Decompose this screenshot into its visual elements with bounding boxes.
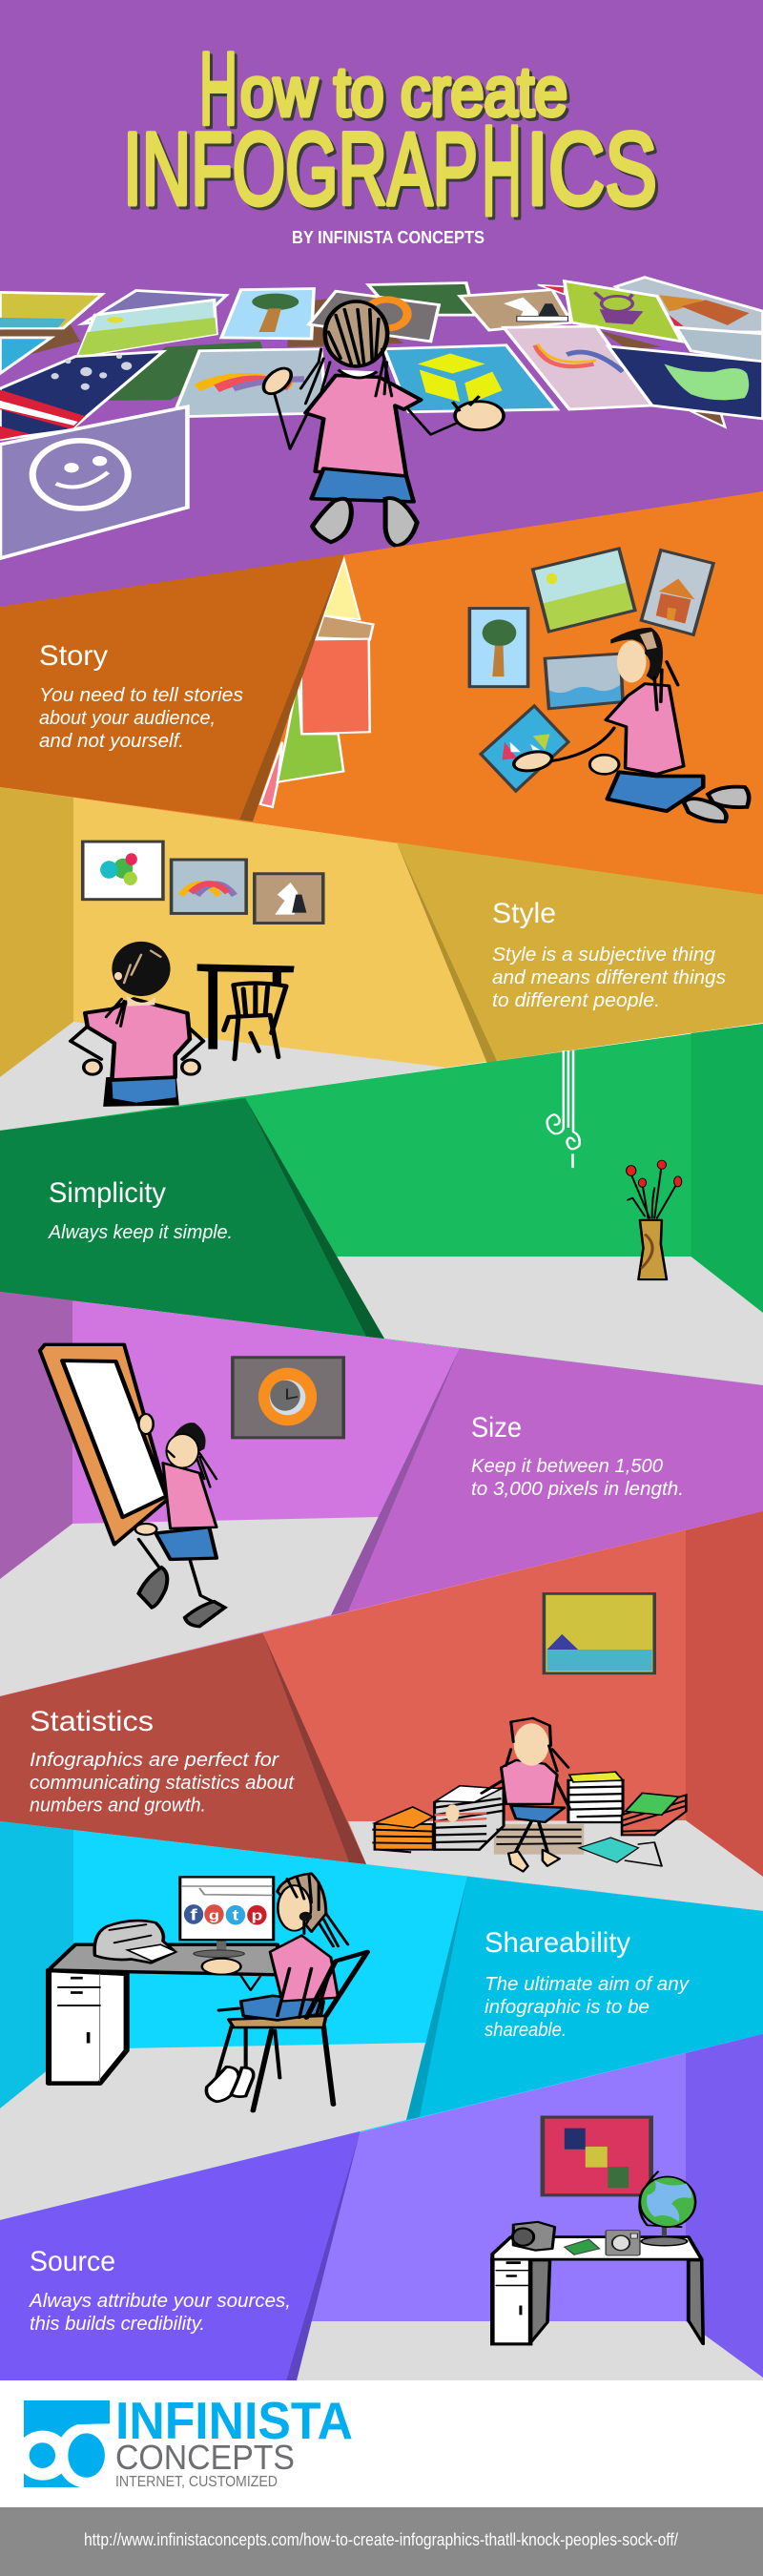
icon: social share buttons: p — [251, 1907, 262, 1923]
text: style body — [492, 945, 726, 1011]
title: How to create: ow to create — [240, 54, 567, 131]
title: How to create: H — [199, 31, 237, 146]
icon: flower vase — [627, 1160, 682, 1279]
pink room left wall — [0, 1292, 72, 1579]
logo tagline: INTERNET, CUSTOMIZED — [115, 2474, 278, 2490]
heading: Statistics: Statistics — [30, 1706, 154, 1737]
icon: hanging white curl — [547, 1050, 580, 1168]
simplicity text panel — [0, 1098, 366, 1337]
heading: Size: Size — [471, 1412, 522, 1444]
icon: clock picture — [233, 1358, 343, 1438]
text: source body — [29, 2291, 291, 2335]
panel: shareability — [0, 1821, 763, 2220]
statistics panel shadow — [263, 1633, 366, 1864]
illustration: girl standing — [71, 942, 203, 1107]
text: story body: and not yourself. — [39, 731, 184, 752]
text: shareability body: infographic is to be — [485, 1997, 650, 2018]
text: style body: Style is a subjective thing — [492, 945, 715, 966]
byline: BY INFINISTA CONCEPTS — [292, 228, 485, 247]
text: statistics body: communicating statistics about — [30, 1773, 295, 1794]
text: story body — [39, 685, 243, 752]
green room right wall — [691, 1024, 763, 1313]
violet room right wall — [686, 2034, 763, 2378]
wall picture: coloured squares — [543, 2117, 651, 2195]
pink room floor — [0, 1517, 379, 1696]
illustration: girl on chair — [202, 1874, 367, 2110]
illustration: girl carrying mirror — [40, 1344, 225, 1627]
scattered picture cards — [0, 278, 763, 558]
red room background — [0, 1511, 763, 1911]
icon: social share buttons: g — [209, 1908, 219, 1922]
illustration: desk with camera and globe — [492, 2171, 703, 2344]
illustration: girl viewing cards — [258, 301, 504, 546]
green room background — [0, 1024, 763, 1385]
pink room background — [0, 1292, 763, 1696]
title: Infographics: H — [482, 100, 522, 242]
text: shareability body — [485, 1974, 690, 2041]
violet room floor — [297, 2321, 763, 2380]
text: shareability body: shareable. — [485, 2020, 567, 2041]
source text panel — [0, 2131, 361, 2380]
yellow room floor — [0, 1022, 447, 1131]
yellow room background — [0, 787, 763, 1131]
text: style body: and means different things — [492, 967, 726, 988]
heading: Style: Style — [492, 898, 556, 929]
red room right wall — [686, 1511, 763, 1877]
size panel shadow — [331, 1348, 460, 1615]
icon: social share buttons: f — [190, 1906, 197, 1924]
heading: Story: Story — [39, 640, 108, 672]
icon: social share buttons — [184, 1904, 267, 1925]
shareability text panel — [420, 1877, 763, 2117]
illustration: desk with printer and computer — [49, 1877, 283, 2084]
title: Infographics: ICS — [526, 111, 657, 226]
text: source body: Always attribute your sources, — [29, 2291, 291, 2312]
yellow room left wall — [0, 787, 73, 1077]
text: statistics body: Infographics are perfect for — [30, 1750, 279, 1771]
illustration: table and chair — [197, 964, 295, 1059]
stack of coloured papers — [260, 559, 373, 807]
source url: http://www.infinistaconcepts.com/how-to-create-infographics-thatll-knock-peoples-sock-off/ — [84, 2530, 678, 2549]
text: shareability body: The ultimate aim of any — [485, 1974, 690, 1995]
text: style body: to different people. — [492, 990, 660, 1011]
cyan room background — [0, 1821, 763, 2220]
icon: infinity logo — [24, 2400, 110, 2487]
logo wordmark: Infinista: INFINISTA — [115, 2391, 353, 2450]
panel: size — [0, 1292, 763, 1696]
wall pictures — [83, 841, 323, 924]
panel: style — [0, 787, 763, 1131]
statistics text panel — [0, 1633, 349, 1862]
style text panel — [397, 842, 763, 1061]
source panel shadow — [286, 2131, 361, 2380]
cyan room left wall — [0, 1821, 73, 2109]
heading: Shareability: Shareability — [485, 1927, 630, 1959]
wall pictures — [469, 549, 713, 791]
panel: source url bar — [0, 2507, 763, 2576]
text: size body: Keep it between 1,500 — [471, 1456, 663, 1477]
cyan room floor — [0, 2043, 425, 2220]
illustration: girl with book stacks — [372, 1718, 686, 1872]
illustration: girl kneeling — [511, 628, 749, 821]
wall picture: sea and sail — [544, 1593, 654, 1673]
text: size body: to 3,000 pixels in length. — [471, 1479, 684, 1500]
panel: statistics — [0, 1511, 763, 1911]
text: story body: about your audience, — [39, 708, 216, 729]
story panel shadow — [239, 554, 344, 821]
text: simplicity body: Always keep it simple. — [48, 1222, 233, 1243]
panel: logo footer — [0, 2380, 763, 2507]
style panel shadow — [397, 842, 497, 1064]
text: statistics body — [30, 1750, 295, 1817]
shareability panel shadow — [406, 1877, 467, 2120]
text: source body: this builds credibility. — [30, 2314, 205, 2335]
orange room background — [0, 491, 763, 895]
size text panel — [348, 1348, 763, 1611]
story text panel — [0, 554, 344, 820]
simplicity panel shadow — [245, 1098, 384, 1339]
text: statistics body: numbers and growth. — [30, 1796, 206, 1817]
text: story body: You need to tell stories — [39, 685, 243, 706]
title: Infographics: INFOGRAP — [123, 111, 478, 226]
panel: source — [0, 2034, 763, 2380]
logo wordmark: Concepts: CONCEPTS — [115, 2438, 295, 2477]
red room floor — [348, 1820, 763, 1911]
violet room background — [0, 2034, 763, 2380]
heading: Simplicity: Simplicity — [49, 1177, 166, 1209]
text: size body — [471, 1456, 684, 1500]
panel: header — [0, 0, 763, 668]
heading: Source: Source — [30, 2246, 115, 2277]
icon: social share buttons: t — [233, 1907, 238, 1923]
green room floor — [337, 1257, 763, 1385]
panel: story — [0, 491, 763, 895]
panel: simplicity — [0, 1024, 763, 1385]
